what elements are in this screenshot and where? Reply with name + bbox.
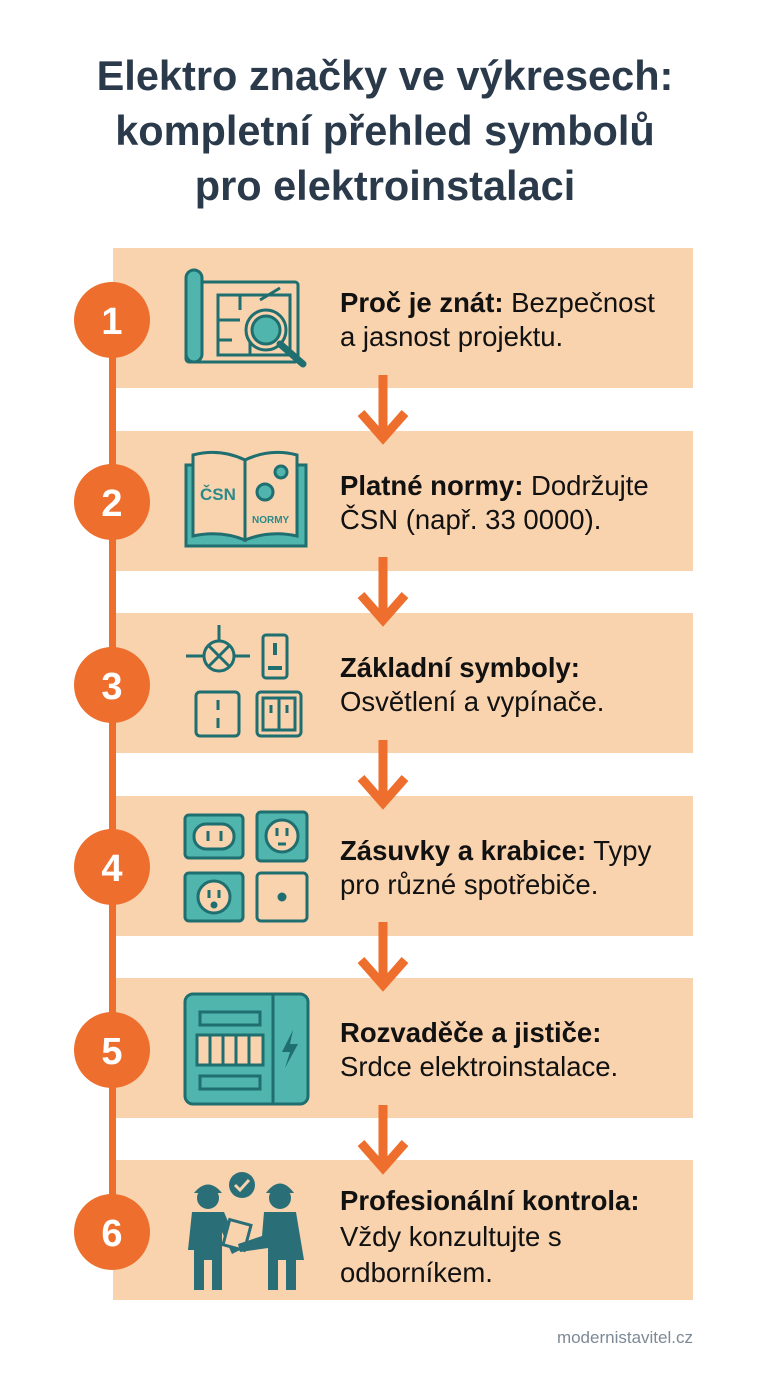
text blocks: Základní symboly: xyxy=(340,652,580,683)
title: kompletní přehled symbolů xyxy=(115,107,655,154)
icon: book ČSN: NORMY xyxy=(252,515,290,526)
panel: 5 xyxy=(113,978,693,1118)
icon: sockets xyxy=(185,812,307,921)
step circles: 4 xyxy=(101,848,123,890)
panel: 1 xyxy=(113,248,693,388)
text blocks: Profesionální kontrola: xyxy=(340,1185,639,1216)
icon: distribution board xyxy=(185,994,308,1104)
icon: book ČSN: ČSN xyxy=(200,485,236,504)
title: Elektro značky ve výkresech: xyxy=(97,52,673,99)
step circles: 1 xyxy=(101,301,123,343)
text blocks: a jasnost projektu. xyxy=(340,321,563,352)
icon: basic symbols xyxy=(186,625,301,736)
text blocks: Srdce elektroinstalace. xyxy=(340,1051,618,1082)
icon: blueprint xyxy=(186,270,303,364)
text blocks: odborníkem. xyxy=(340,1257,493,1288)
panel: 2 xyxy=(113,431,693,571)
arrows xyxy=(361,375,405,1168)
footer: modernistavitel.cz xyxy=(557,1328,693,1347)
panel: 4 xyxy=(113,796,693,936)
step circles: 3 xyxy=(101,666,123,708)
text blocks xyxy=(340,287,655,1288)
text blocks: Rozvaděče a jističe: xyxy=(340,1017,601,1048)
text blocks: Vždy konzultujte s xyxy=(340,1221,562,1252)
panel: 3 xyxy=(113,613,693,753)
text blocks: pro různé spotřebiče. xyxy=(340,869,598,900)
title xyxy=(97,52,673,209)
step circles: 6 xyxy=(101,1213,123,1255)
icon: workers xyxy=(188,1172,304,1290)
text blocks: Platné normy: Dodržujte xyxy=(340,470,649,501)
step circles: 2 xyxy=(101,483,123,525)
step circles xyxy=(74,282,150,1270)
timeline line xyxy=(109,300,116,1240)
panel: 6 xyxy=(113,1160,693,1300)
text blocks: ČSN (např. 33 0000). xyxy=(340,504,601,535)
title: pro elektroinstalaci xyxy=(195,162,575,209)
text blocks: Osvětlení a vypínače. xyxy=(340,686,604,717)
icon: book ČSN xyxy=(186,452,306,546)
text blocks: Zásuvky a krabice: Typy xyxy=(340,835,652,866)
step circles: 5 xyxy=(101,1031,123,1073)
text blocks: Proč je znát: Bezpečnost xyxy=(340,287,655,318)
